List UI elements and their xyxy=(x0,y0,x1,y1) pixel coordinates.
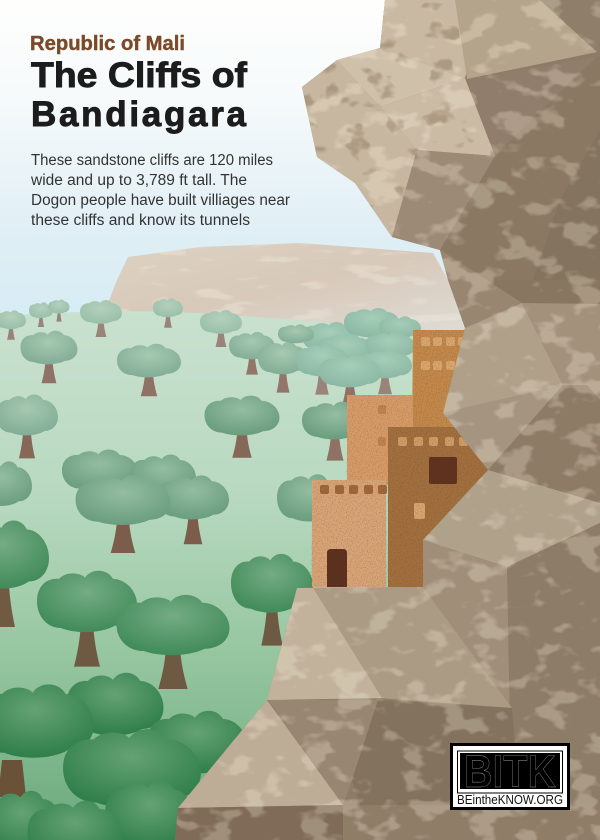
description text: Dogon people have built villiages near xyxy=(31,192,290,209)
subtitle: Republic of Mali xyxy=(30,33,185,55)
BITK logo: BEintheKNOW.ORG xyxy=(457,793,563,807)
tower xyxy=(412,330,470,432)
BITK logo xyxy=(450,743,570,810)
description text: These sandstone cliffs are 120 miles xyxy=(31,152,273,169)
description text: wide and up to 3,789 ft tall. The xyxy=(30,172,247,189)
nearest tree canopies xyxy=(0,673,247,840)
title xyxy=(31,56,247,134)
sandstone cliff xyxy=(170,0,600,840)
small light window xyxy=(414,503,425,519)
sky background xyxy=(0,0,600,330)
title: Bandiagara xyxy=(31,95,247,134)
distant mesa xyxy=(109,243,464,330)
mud-brick village xyxy=(305,325,495,590)
dark house xyxy=(388,427,493,587)
cliff facets: ledge and base xyxy=(175,523,600,840)
mid-distance trees xyxy=(0,331,368,461)
central tree group xyxy=(0,449,343,553)
large dark window xyxy=(429,457,457,484)
far trees xyxy=(0,298,242,347)
green plain xyxy=(0,311,470,840)
middle house windows xyxy=(378,405,386,446)
foreground trees xyxy=(0,521,313,689)
low house xyxy=(312,480,386,587)
cliff facets: middle section xyxy=(423,250,600,567)
title: The Cliffs of xyxy=(31,56,247,95)
description text xyxy=(30,152,290,229)
description text: these cliffs and know its tunnels xyxy=(31,212,250,229)
dark house window row xyxy=(398,437,468,446)
cliff mottling xyxy=(170,0,600,840)
door xyxy=(327,549,347,587)
middle house xyxy=(347,395,413,485)
tree cluster behind the village xyxy=(229,308,421,406)
tower windows xyxy=(421,337,467,370)
cliff facets: top section xyxy=(170,0,600,840)
BITK logo: BITK xyxy=(464,746,556,797)
low house window row xyxy=(320,485,387,494)
